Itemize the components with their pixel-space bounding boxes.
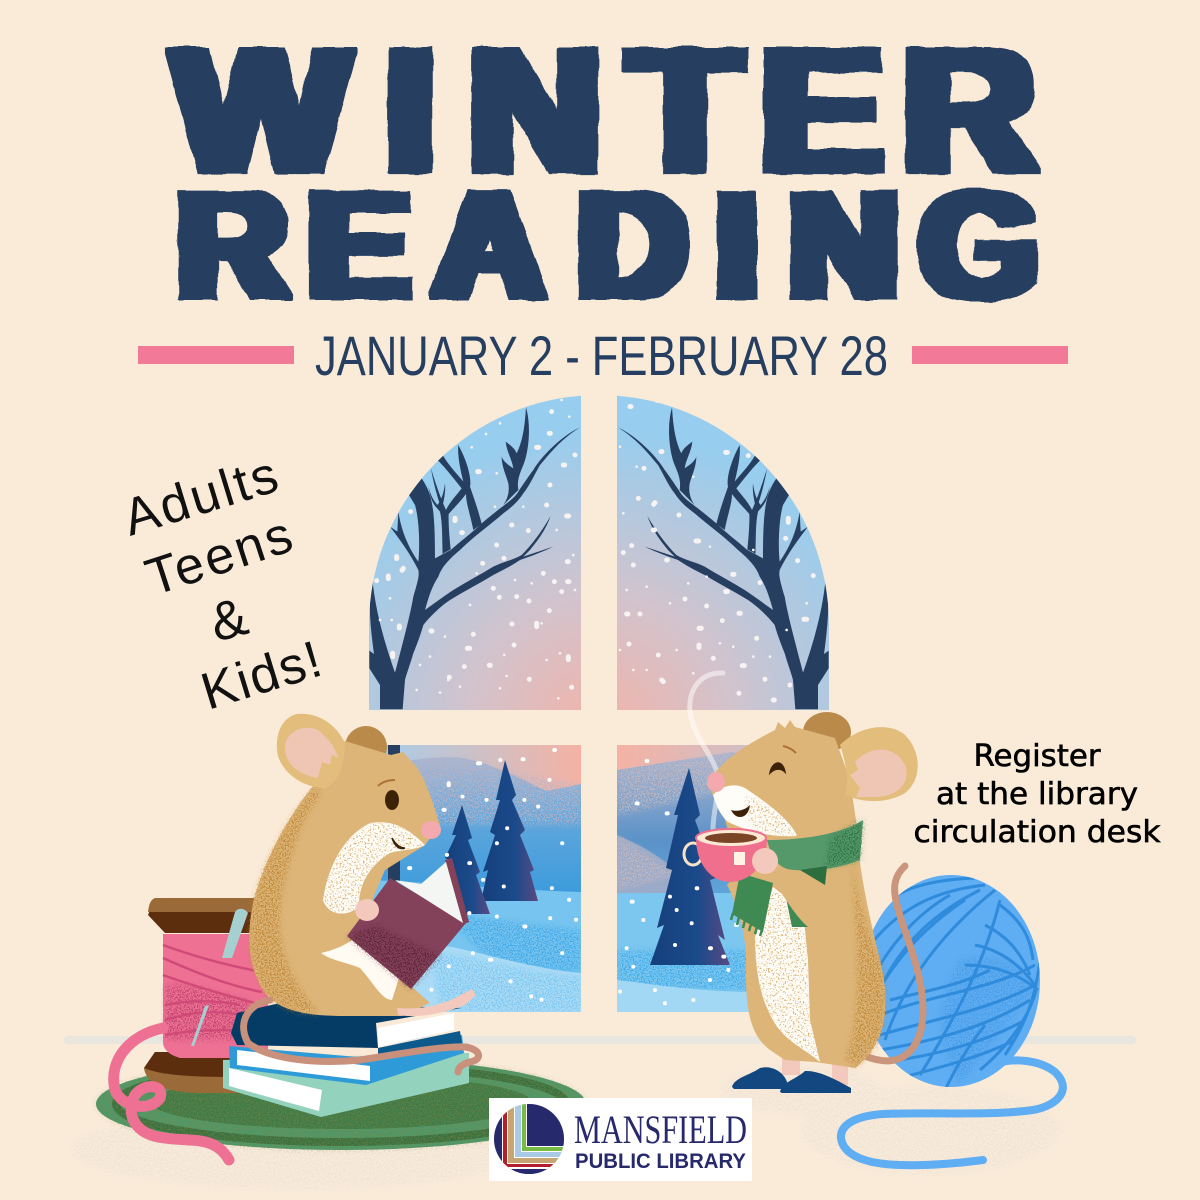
blue band [617, 946, 746, 992]
rug speckle [96, 1058, 586, 1150]
upper panes [360, 390, 840, 715]
top flange [148, 898, 255, 933]
green stripe [522, 1100, 570, 1151]
ball [862, 875, 1040, 1087]
mouse with tea [684, 712, 923, 1093]
mouth [392, 838, 405, 849]
date text: JANUARY 2 - FEBRUARY 28 [315, 324, 888, 387]
rug outer [96, 1058, 586, 1150]
rug centre [151, 1075, 531, 1129]
fir tree small [445, 805, 490, 914]
rug ring [116, 1066, 566, 1142]
white muzzle [713, 785, 797, 836]
logo mark [494, 1104, 564, 1174]
navy quarter [527, 1100, 570, 1146]
scarf knot [800, 866, 827, 885]
bare tree right [618, 407, 829, 709]
yarn strands [866, 878, 1040, 1090]
brow [783, 746, 796, 753]
closed eye [770, 763, 785, 773]
Teens: Teens [139, 506, 299, 607]
scarf shading [825, 820, 863, 868]
Kids: Kids! [195, 630, 328, 721]
Adults: Adults [117, 446, 285, 547]
near hill [617, 835, 672, 893]
bottom flange [144, 1052, 240, 1093]
back fur shading [249, 785, 320, 1014]
chest speckle [323, 822, 425, 914]
body shading [845, 850, 886, 1068]
steam curl [725, 766, 748, 790]
yarn ball [841, 875, 1063, 1165]
hills speckle [617, 752, 733, 890]
shadow centre-right [720, 1065, 880, 1115]
snowy ground [372, 880, 581, 973]
far hill [617, 752, 736, 893]
foot [397, 989, 476, 1016]
open book cover [347, 878, 466, 989]
cup handle [684, 843, 702, 865]
ground shade [459, 914, 581, 972]
back ear [803, 712, 851, 752]
sky [360, 390, 840, 715]
nose [707, 772, 725, 792]
middle book cover [229, 1035, 464, 1085]
tail [244, 1000, 479, 1072]
brow [378, 780, 395, 786]
loose thread [114, 1028, 229, 1160]
tree trunk in pane [388, 745, 400, 882]
floor shadows [70, 1065, 1060, 1190]
navy disc [494, 1104, 564, 1174]
logo background [489, 1098, 752, 1181]
ampersand: & [204, 586, 254, 654]
white ground [502, 1104, 564, 1170]
snowflakes right pane [623, 407, 813, 700]
window [360, 390, 840, 1012]
right slipper [780, 1071, 851, 1093]
MANSFIELD: MANSFIELD [574, 1107, 747, 1152]
steam swirl [690, 673, 723, 832]
ear [277, 714, 345, 788]
white chest [755, 887, 820, 1062]
hand [355, 899, 379, 921]
library logo [489, 1098, 752, 1181]
ear [840, 727, 918, 801]
top book cover [231, 1003, 461, 1048]
muzzle speckle [745, 795, 797, 836]
fir tree [650, 768, 730, 965]
needle upper [222, 909, 248, 958]
top book pages [378, 1013, 454, 1047]
thread lines [163, 945, 262, 1035]
lower right pane [617, 745, 749, 1012]
hills speckle [412, 758, 581, 828]
nose [421, 821, 441, 839]
mouse reading [244, 714, 479, 1072]
left slipper [732, 1067, 788, 1089]
arm [776, 868, 834, 936]
small snow left pane [380, 400, 575, 698]
tea [705, 833, 757, 843]
tan stripe [508, 1108, 558, 1163]
shadow left [70, 1110, 530, 1190]
needle lower [191, 1005, 209, 1046]
bare tree left [369, 407, 580, 709]
white belly [321, 940, 400, 1000]
title line: WINTER: WINTER [174, 13, 1036, 209]
scarf hanging right [785, 893, 815, 927]
cup rim [696, 829, 766, 847]
sky [617, 745, 748, 770]
chest speckle [755, 887, 820, 1062]
cup [696, 838, 767, 882]
middle book pages [237, 1050, 370, 1081]
scarf fringe left [731, 913, 762, 936]
book pages [395, 862, 463, 923]
sky [386, 745, 581, 791]
right pink bar [912, 346, 1068, 364]
body and head [249, 741, 440, 1016]
book shade [347, 925, 440, 989]
small snow right pane [620, 402, 807, 673]
date banner [138, 324, 1068, 387]
light blue stripe [515, 1105, 562, 1157]
book spine [445, 858, 469, 925]
snow [620, 761, 737, 1003]
bottom book cover [223, 1053, 469, 1117]
rug [96, 1058, 586, 1150]
top book back cover [378, 1031, 462, 1060]
title line: READING: READING [177, 161, 1038, 330]
lower left pane [369, 745, 581, 1012]
legs [782, 1055, 848, 1085]
thread spool [114, 898, 268, 1160]
inner ear [285, 728, 338, 778]
red stripe [503, 1112, 554, 1167]
line 2: at the library [936, 777, 1138, 812]
left pink bar [138, 346, 294, 364]
body and head [708, 720, 886, 1068]
audience text [117, 446, 328, 721]
scarf band [767, 820, 863, 871]
navy base [490, 1169, 570, 1181]
shadow right [800, 1085, 1060, 1175]
white chest fur [323, 822, 425, 914]
mouth [731, 805, 750, 817]
eye [385, 790, 399, 810]
PUBLIC LIBRARY: PUBLIC LIBRARY [575, 1150, 746, 1173]
line 3: circulation desk [914, 815, 1161, 850]
tea tag [734, 852, 745, 865]
floor line [64, 1036, 1136, 1044]
register text [914, 739, 1161, 850]
bottom book pages [229, 1068, 322, 1111]
snowflakes left pane [377, 412, 575, 687]
tail [865, 866, 923, 1061]
foreground snow [617, 980, 749, 1012]
foreground snow speckle [430, 950, 581, 1012]
foreground snow [412, 946, 581, 1012]
loose yarn end [841, 1060, 1063, 1165]
scarf hanging left [732, 873, 773, 932]
stack of books [223, 1003, 469, 1117]
inner ear [850, 750, 907, 797]
far hills [380, 757, 581, 892]
thread body [163, 934, 268, 1058]
back ear [345, 726, 387, 768]
thread shade [165, 984, 250, 1040]
fir tree large [481, 760, 538, 901]
snowy ground [617, 893, 746, 992]
snow [409, 750, 576, 1000]
line 1: Register [974, 739, 1101, 774]
yarn shading [941, 956, 1035, 1085]
top flange light [148, 898, 255, 912]
title: winter reading [174, 13, 1038, 330]
bottom flange dark [144, 1052, 235, 1077]
steam from cup [690, 673, 748, 832]
hand [752, 848, 778, 874]
